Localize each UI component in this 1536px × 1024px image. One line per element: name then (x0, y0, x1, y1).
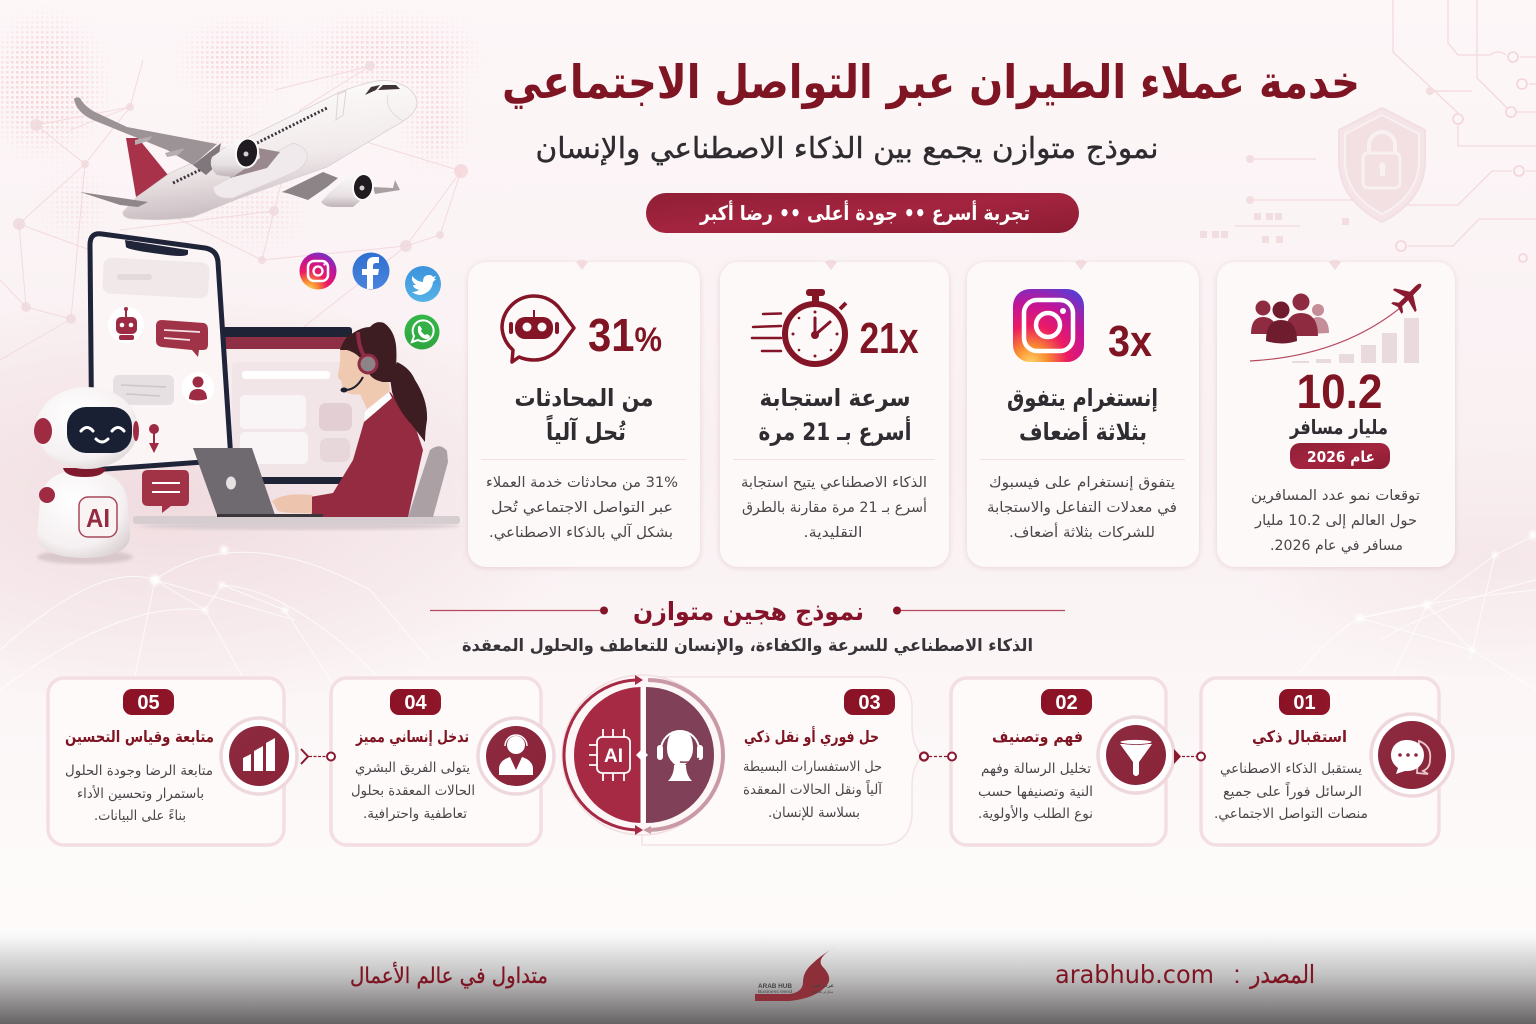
illustration: AI robot (34, 387, 189, 564)
number badge (844, 689, 895, 715)
robot head (36, 387, 138, 469)
card heading (758, 384, 912, 446)
step text: متابعة الرضا وجودة الحلول (65, 763, 213, 779)
icon: bar chart (221, 718, 297, 794)
footer: source (1055, 960, 1315, 989)
step text: منصات التواصل الاجتماعي. (1214, 806, 1368, 822)
main wing (74, 97, 217, 165)
step text: باستمرار وتحسين الأداء (77, 785, 204, 802)
panel: card 10.2 (1217, 254, 1455, 567)
step text (743, 759, 883, 821)
wing section behind engine (230, 148, 280, 178)
neck and face (338, 345, 390, 409)
year pill: عام 2026 (1307, 448, 1375, 466)
card body text: للشركات بثلاثة أضعاف. (1009, 522, 1155, 541)
AI badge (79, 497, 117, 537)
robot smile (81, 428, 124, 442)
stat 21x: 21x (860, 314, 919, 363)
icon: headset person (657, 730, 703, 781)
card heading: سرعة استجابة (760, 384, 910, 412)
footer: tagline: متداول في عالم الأعمال (350, 962, 548, 989)
year pill (1290, 443, 1390, 469)
illustration: desk (133, 516, 460, 530)
illustration: social icons (300, 252, 441, 350)
footer: logo: Business trend (758, 989, 793, 994)
icon: chat robot (108, 307, 144, 343)
step text: الرسائل فوراً على جميع (1223, 781, 1362, 800)
card body text: توقعات نمو عدد المسافرين (1251, 488, 1420, 504)
number badge: 04 (404, 692, 427, 714)
connector 04 to 05 (301, 749, 335, 764)
icon: instagram (300, 252, 336, 290)
far wing (282, 172, 338, 200)
tagline pill (646, 193, 1079, 233)
step 01 (1201, 678, 1453, 845)
step 04 (331, 678, 554, 845)
connector 01 to 02 (1174, 749, 1205, 764)
cockpit windows (365, 85, 400, 95)
number badge (123, 689, 174, 715)
step text: الحالات المعقدة بحلول (351, 783, 475, 799)
collar (63, 468, 106, 477)
icon: funnel (1098, 717, 1174, 793)
network lines (0, 60, 468, 360)
footer: logo: متداول في عالم الأعمال (811, 989, 833, 994)
icon: twitter (405, 266, 441, 302)
door (336, 91, 346, 120)
chair (408, 446, 448, 517)
headset (358, 332, 364, 356)
card body text (1251, 488, 1420, 554)
step title: متابعة وقياس التحسين (65, 727, 214, 746)
jacket (310, 392, 423, 517)
panel: card 3x (967, 254, 1199, 567)
title: خدمة عملاء الطيران عبر التواصل الاجتماعي (502, 55, 1360, 109)
step text: تخليل الرسالة وفهم (981, 761, 1091, 777)
footer: logo (755, 947, 835, 1001)
icon: instagram large (1013, 289, 1084, 362)
stat label: مليار مسافر (1289, 415, 1388, 439)
card body text (741, 475, 927, 541)
tagline pill: تجربة أسرع •• جودة أعلى •• رضا أكبر (699, 199, 1030, 225)
number badge: 01 (1293, 692, 1316, 714)
footer: logo: عرب هب (812, 983, 834, 989)
icon: robot speech bubble (502, 296, 574, 362)
tail fin (126, 138, 168, 197)
step frame (642, 677, 922, 845)
icon: chat bubbles (1371, 714, 1453, 796)
footer: source: arabhub.com (1055, 960, 1214, 989)
step text: بناءً على البيانات. (94, 808, 186, 824)
card body text: مسافر في عام 2026. (1270, 538, 1403, 554)
illustration: airplane (74, 80, 417, 220)
illustration: monitor (222, 327, 367, 484)
stat 10.2: 10.2 (1296, 366, 1382, 419)
number badge (1279, 689, 1330, 715)
footer: logo: ARAB HUB (758, 984, 793, 990)
step text: نوع الطلب والأولوية. (978, 805, 1093, 822)
icon: agent person (478, 718, 554, 794)
AI badge: AI (86, 503, 110, 533)
icon: stopwatch (752, 289, 846, 364)
step text (1214, 761, 1368, 822)
number badge: 03 (858, 692, 881, 714)
step text: يستقبل الذكاء الاصطناعي (1220, 761, 1362, 777)
card body text: 31% من محادثات خدمة العملاء (486, 475, 678, 491)
step text (351, 760, 475, 822)
card heading: تُحل آلياً (546, 415, 626, 446)
card body text: الذكاء الاصطناعي يتيح استجابة (741, 475, 927, 491)
card body text: يتفوق إنستغرام على فيسبوك (989, 475, 1175, 491)
section heading with lines: نموذج هجين متوازن (633, 597, 864, 627)
number badge (390, 689, 441, 715)
chat bubble maroon (156, 320, 208, 357)
icon: facebook (352, 252, 390, 290)
number badge: 02 (1055, 692, 1078, 714)
icon: chat person (182, 372, 214, 404)
card body text (987, 475, 1177, 541)
icon: whatsapp (404, 314, 440, 350)
AI and human split disc (562, 675, 723, 835)
card heading: بثلاثة أضعاف (1019, 416, 1147, 446)
circuit decoration top right (1200, 0, 1536, 262)
card heading: إنستغرام يتفوق (1007, 384, 1158, 412)
phone search bar (102, 257, 210, 299)
step text (65, 763, 213, 824)
icon: shield with lock (1339, 108, 1425, 222)
stat 31%: 31% (588, 309, 662, 361)
world map dot background (1, 18, 473, 238)
section subheading: الذكاء الاصطناعي للسرعة والكفاءة، والإنسان للتعاطف والحلول المعقدة (462, 636, 1033, 656)
step text: حل الاستفسارات البسيطة (743, 759, 882, 775)
hair (340, 322, 396, 382)
nose line (387, 95, 403, 121)
card body text: التقليدية. (804, 525, 862, 541)
card heading: أسرع بـ 21 مرة (758, 416, 912, 446)
number badge: 05 (137, 692, 160, 714)
step text: تعاطفية واحترافية. (363, 806, 467, 822)
number badge (1041, 689, 1092, 715)
horizontal stabiliser (80, 192, 148, 207)
card body text: أسرع بـ 21 مرة مقارنة بالطرق (742, 497, 927, 516)
step text: يتولى الفريق البشري (355, 760, 470, 776)
step text: آلياً ونقل الحالات المعقدة (743, 779, 883, 798)
far stabiliser (373, 180, 400, 194)
card body text: بشكل آلي بالذكاء الاصطناعي. (489, 523, 673, 541)
footer band (0, 925, 1536, 1024)
panel: card 21x (720, 254, 949, 567)
card body text: عبر التواصل الاجتماعي تُحل (491, 500, 673, 516)
engine two (321, 175, 373, 207)
card heading (514, 384, 654, 446)
step title: حل فوري أو نقل ذكي (744, 726, 879, 747)
icon: people (1251, 294, 1329, 344)
step 02 (951, 678, 1174, 845)
step title: تدخل إنساني مميز (355, 727, 469, 747)
icon: pin (149, 424, 159, 453)
AI half (564, 675, 643, 835)
hand (272, 494, 312, 513)
white web network lower (0, 531, 1536, 710)
footer: source: : (1234, 961, 1240, 989)
card body text (486, 475, 678, 541)
icon: AI chip (589, 729, 630, 781)
step title: فهم وتصنيف (992, 727, 1083, 746)
robot body (37, 470, 130, 558)
ponytail (390, 362, 427, 442)
subtitle: نموذج متوازن يجمع بين الذكاء الاصطناعي والإنسان (536, 131, 1158, 166)
step text: النية وتصنيفها حسب (978, 784, 1093, 800)
card heading (1007, 384, 1158, 446)
card body text: حول العالم إلى 10.2 مليار (1254, 513, 1417, 529)
step title: استقبال ذكي (1252, 727, 1347, 747)
card heading: من المحادثات (514, 384, 654, 412)
chat bubble grey (113, 375, 174, 405)
growth bars (1292, 318, 1419, 363)
growth curve (1250, 308, 1400, 361)
robot face screen (67, 407, 132, 453)
step 05 (48, 678, 297, 845)
icon: AI chip: AI (604, 746, 623, 767)
fuselage (123, 80, 417, 220)
belly fairing (213, 143, 307, 198)
human half (643, 680, 723, 834)
connector 02 to 03 (920, 752, 956, 760)
section heading with lines (430, 597, 1065, 627)
robot ears (34, 418, 52, 444)
laptop (193, 448, 275, 515)
step text (978, 761, 1093, 822)
icon: plane (1385, 273, 1432, 320)
card body text: في معدلات التفاعل والاستجابة (987, 500, 1177, 516)
panel: card 31% (468, 254, 700, 567)
step 03 (562, 675, 922, 845)
step text: بسلاسة للإنسان. (768, 805, 860, 821)
cabin windows (173, 108, 327, 183)
footer: source: المصدر (1248, 960, 1315, 989)
engine one (211, 140, 260, 177)
stat 3x: 3x (1108, 317, 1152, 366)
chat bubble lower (142, 470, 189, 513)
illustration: agent at laptop (193, 322, 448, 517)
illustration: phone with chat (90, 234, 231, 470)
